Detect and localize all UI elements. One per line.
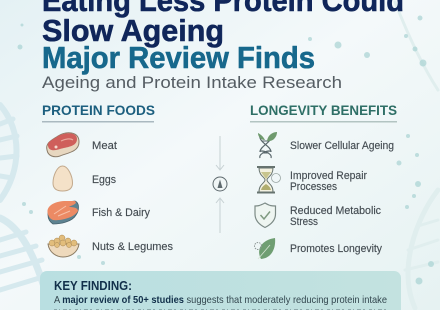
key finding heading: KEY FINDING: [54,278,132,293]
text: fish and dairy: Fish & Dairy [92,207,150,219]
text: reduced metabolic stress: Reduced Metabolic [290,205,381,217]
text: improved repair processes: Processes [290,181,337,193]
text: meat: Meat [92,140,117,152]
text: reduced metabolic stress [290,205,381,228]
arrow down [216,136,224,170]
key finding text: A major review of 50+ studies suggests that moderately reducing protein intake [54,294,387,306]
arrow up [216,198,224,233]
text: slower cellular ageing: Slower Cellular Ageing [290,140,394,152]
panel: key finding [40,271,401,310]
icon: meat [47,133,79,157]
subtitle: Ageing and Protein Intake Research [42,73,342,92]
text: reduced metabolic stress: Stress [290,216,318,228]
text: promotes longevity: Promotes Longevity [290,243,382,255]
text: nuts and legumes: Nuts & Legumes [92,241,173,253]
heading: longevity benefits: LONGEVITY BENEFITS [250,102,397,118]
background DNA left [0,105,50,308]
icon: dna sprout [258,132,277,158]
icon: nuts bowl [48,235,79,257]
title: Major Review Finds [42,40,315,75]
text: eggs: Eggs [92,174,116,186]
icon: central circle [213,177,227,191]
title [42,0,404,75]
title: Slow Ageing [42,13,224,48]
icon: salmon [47,201,78,224]
background DNA right [395,2,438,308]
icon: hourglass [257,167,280,192]
icon: leaf [254,238,275,259]
heading: protein foods: PROTEIN FOODS [42,102,155,118]
text: improved repair processes [290,170,367,193]
icon: shield [255,203,276,228]
next text line, cut off by the frame [54,308,387,310]
icon: egg [53,166,72,191]
text: improved repair processes: Improved Repair [290,170,367,182]
